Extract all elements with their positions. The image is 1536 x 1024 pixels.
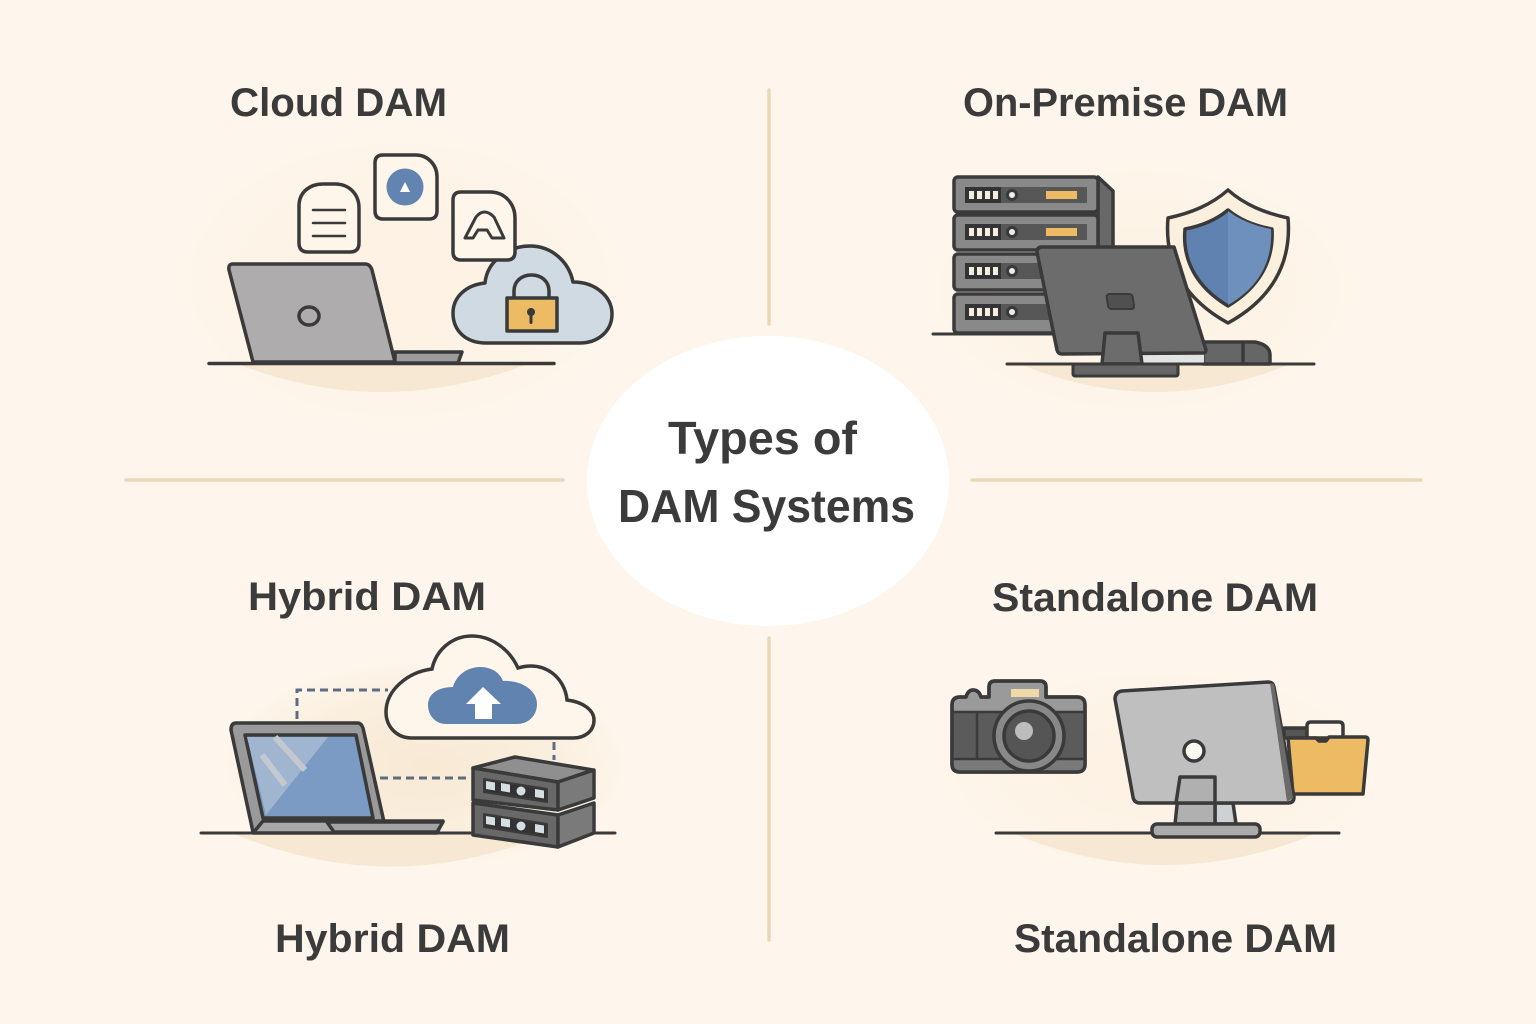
icon: desktop monitor — [1115, 682, 1294, 837]
icon: text document — [299, 184, 359, 252]
illustration: ground shadow — [1020, 364, 1290, 392]
panel: Cloud DAM — [209, 81, 612, 392]
heading: Cloud DAM: Cloud DAM — [230, 81, 447, 125]
icon: image card — [375, 155, 437, 219]
center title — [587, 336, 949, 626]
center title: Types of — [668, 412, 858, 464]
icon: security shield — [1168, 190, 1288, 323]
icon: stacked storage — [473, 757, 594, 847]
heading: Hybrid DAM upper: Hybrid DAM — [248, 575, 486, 619]
heading: Standalone DAM upper: Standalone DAM — [992, 576, 1318, 620]
illustration: ground shadow — [232, 833, 550, 866]
dashed connectors — [297, 690, 554, 778]
icon: server rack — [954, 177, 1113, 333]
icon: cloud with upload arrow — [386, 636, 594, 738]
icon: arch file — [453, 192, 515, 260]
ground line — [209, 362, 554, 365]
illustration: ground shadow — [1012, 833, 1317, 865]
ground line — [996, 832, 1339, 834]
icon: folder — [1284, 722, 1368, 794]
panel: Hybrid DAM — [201, 575, 615, 961]
panel: On-Premise DAM — [933, 81, 1314, 392]
icon: camera — [952, 681, 1085, 772]
illustration: ground shadow — [238, 364, 528, 392]
icon: laptop with blue screen — [231, 723, 443, 833]
icon: laptop — [229, 264, 462, 363]
ground line — [201, 832, 615, 834]
heading: On-Premise DAM: On-Premise DAM — [963, 81, 1288, 125]
heading: Hybrid DAM lower: Hybrid DAM — [275, 917, 510, 961]
icon: desktop monitor — [1037, 247, 1270, 364]
heading: Standalone DAM lower: Standalone DAM — [1014, 917, 1337, 961]
panel: Standalone DAM — [952, 576, 1368, 961]
monitor base — [1073, 364, 1178, 376]
icon: cloud with padlock — [453, 246, 612, 343]
center title: DAM Systems — [618, 480, 915, 532]
ground line — [1007, 362, 1314, 366]
